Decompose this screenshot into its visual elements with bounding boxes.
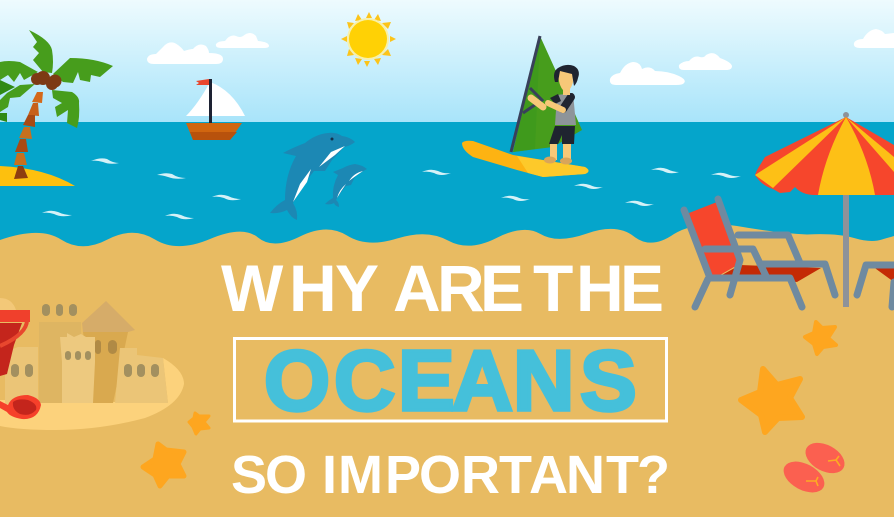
central tower bbox=[60, 333, 95, 403]
right wall bbox=[115, 348, 168, 403]
sun bbox=[341, 12, 396, 67]
sand bbox=[0, 224, 894, 517]
mast bbox=[511, 36, 540, 152]
red shovel bbox=[0, 395, 41, 419]
roof bbox=[82, 301, 135, 332]
windows bbox=[11, 304, 159, 377]
palm trunk bbox=[14, 92, 43, 179]
hull bbox=[186, 123, 242, 140]
red deck chair bbox=[684, 199, 835, 307]
pole bbox=[843, 195, 849, 307]
island bbox=[0, 166, 75, 186]
large dolphin bbox=[270, 133, 355, 220]
boom bbox=[523, 88, 542, 113]
title line: so important: SO IMPORTANT? bbox=[231, 445, 670, 505]
flip flops bbox=[778, 437, 850, 499]
tall tower bbox=[39, 322, 81, 403]
sea bbox=[0, 122, 894, 252]
canopy bbox=[755, 117, 894, 195]
left wall bbox=[5, 347, 38, 404]
wave marks bbox=[42, 158, 741, 219]
coconuts bbox=[31, 71, 62, 90]
beach umbrella bbox=[755, 112, 894, 307]
hair bbox=[554, 65, 579, 86]
board bbox=[462, 141, 588, 177]
head bbox=[558, 70, 573, 91]
torso bbox=[555, 93, 576, 125]
chair frame bbox=[684, 199, 835, 307]
sail bbox=[513, 36, 582, 152]
clouds bbox=[147, 29, 894, 85]
small dolphin bbox=[325, 164, 367, 207]
back cushion bbox=[689, 202, 741, 275]
sky bbox=[0, 0, 894, 123]
roof tower bbox=[83, 332, 128, 403]
seat cushion bbox=[722, 265, 821, 282]
shorts bbox=[549, 126, 575, 144]
starfish bbox=[143, 322, 836, 486]
right flip flop bbox=[800, 437, 850, 479]
sandcastle bbox=[0, 298, 184, 430]
mast bbox=[209, 79, 212, 123]
sailboat bbox=[186, 79, 245, 140]
sand mound bbox=[0, 358, 184, 430]
title line: why are the: WHY ARE THE bbox=[221, 251, 664, 325]
title box frame bbox=[234, 338, 666, 421]
legs bbox=[550, 143, 557, 160]
palm leaves bbox=[0, 30, 113, 128]
title word: oceans: OCEANS bbox=[264, 334, 637, 429]
left flip flop bbox=[778, 455, 830, 499]
second deck chair bbox=[857, 265, 894, 307]
windsurfer bbox=[462, 36, 588, 177]
flag bbox=[196, 79, 209, 85]
feet bbox=[544, 156, 556, 164]
sail bbox=[186, 82, 245, 116]
arm bbox=[563, 97, 571, 109]
palm tree bbox=[0, 30, 113, 179]
red bucket bbox=[0, 310, 30, 376]
dolphins bbox=[270, 133, 367, 220]
